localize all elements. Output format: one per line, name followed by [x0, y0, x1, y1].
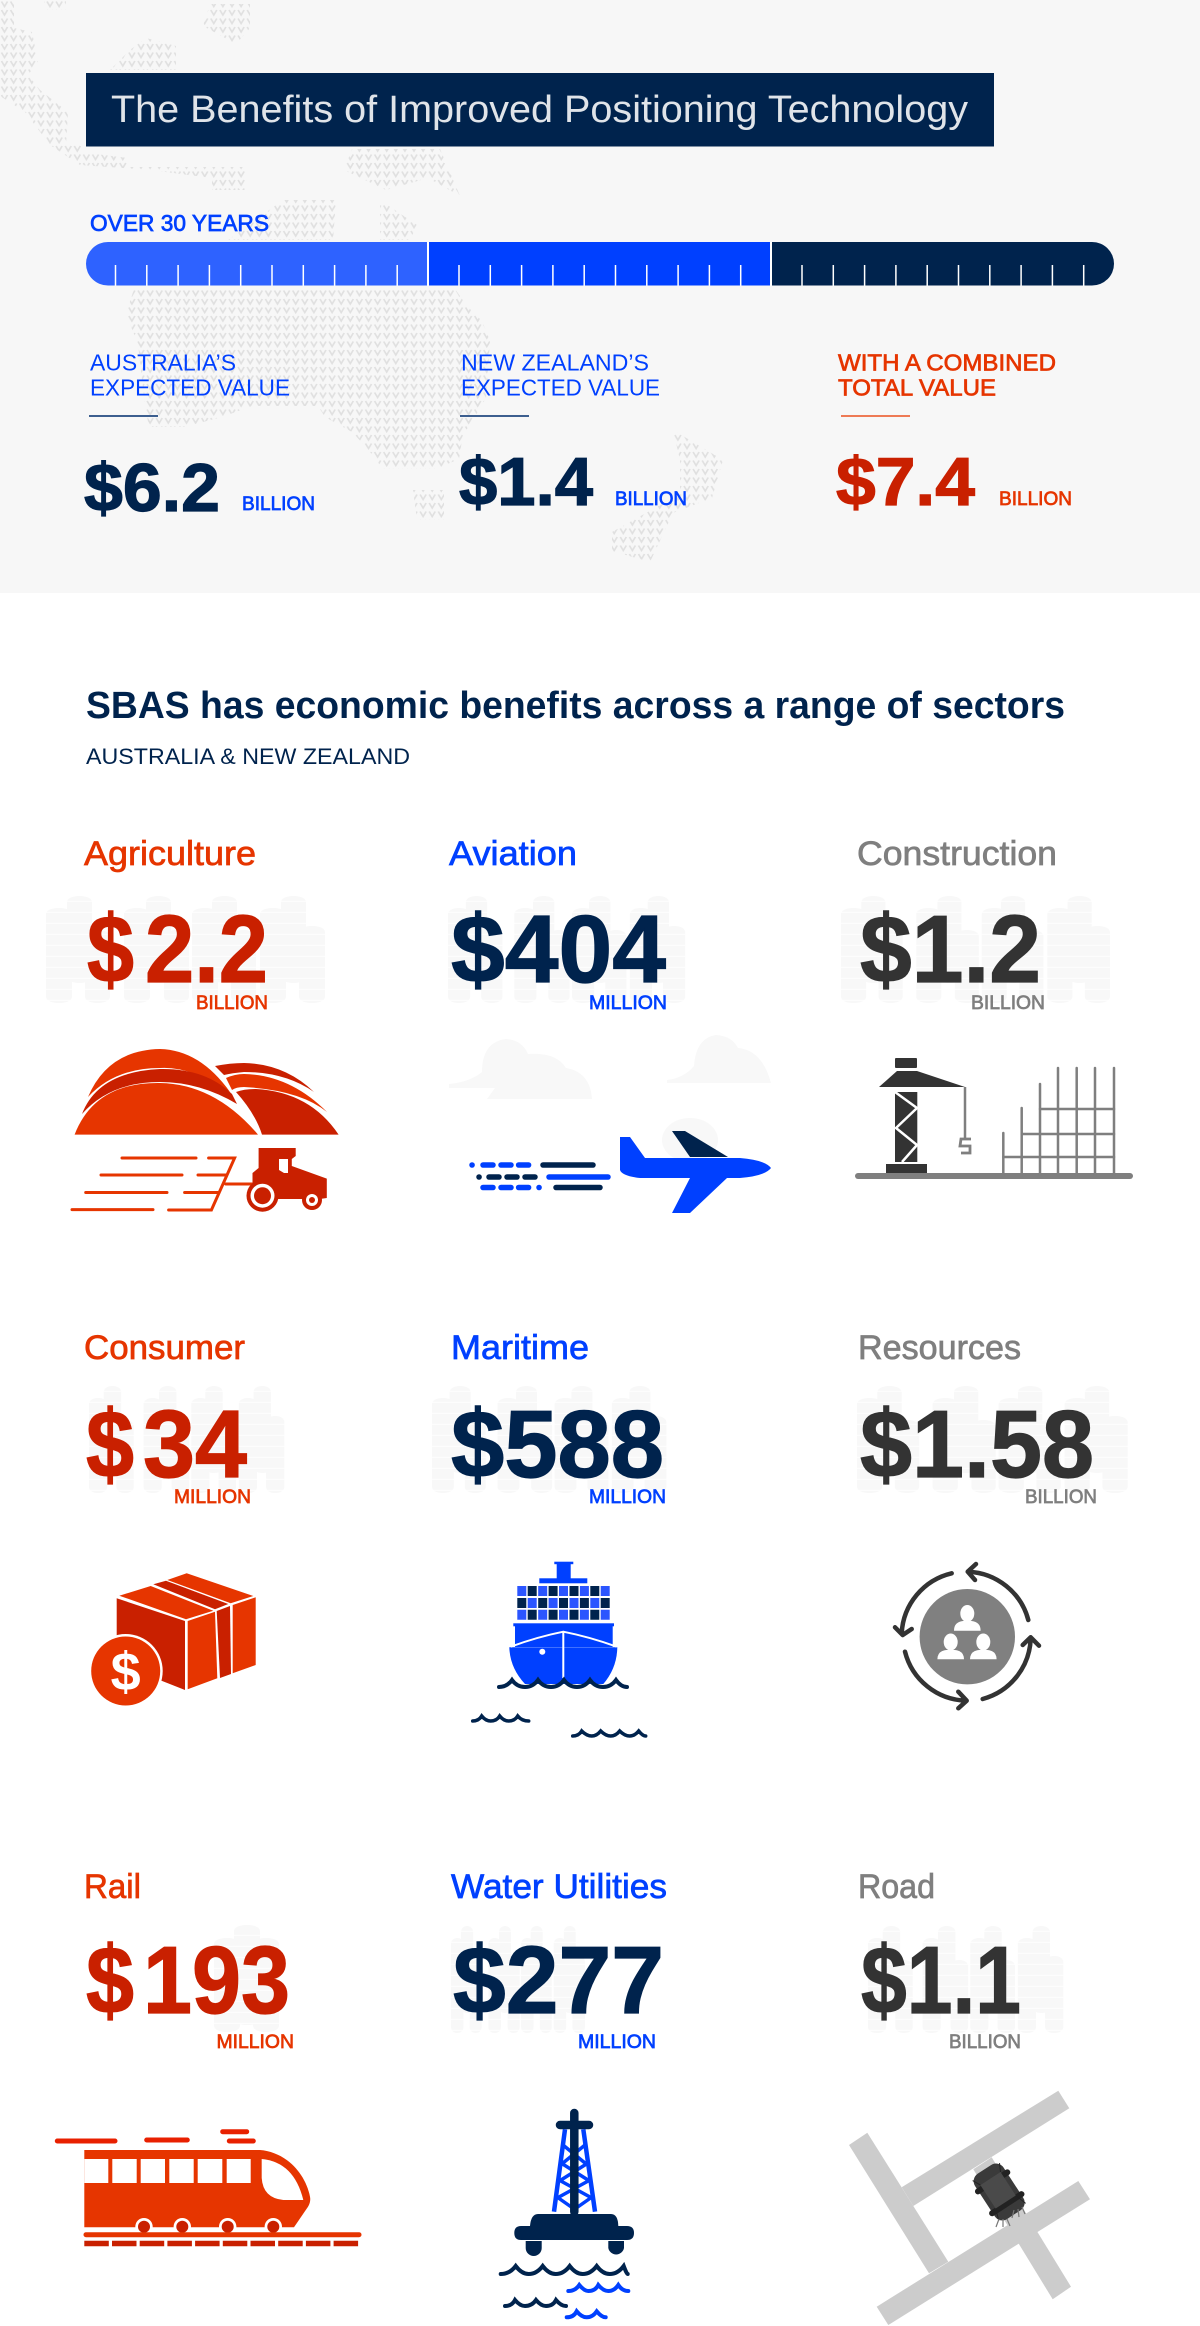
- label: Consumer: [84, 1329, 245, 1367]
- coin stacks backdrop: [868, 1926, 1063, 2033]
- panel: construction: [841, 835, 1130, 1176]
- section heading: SBAS has economic benefits across a range of sectors: [86, 685, 1065, 727]
- value: $: [86, 1391, 134, 1498]
- unit: BILLION: [1025, 1487, 1097, 1508]
- stat: combined total: $7.4: [836, 444, 975, 520]
- value: 2.2: [145, 896, 268, 1003]
- stat: New Zealand: [459, 350, 687, 520]
- coin stacks backdrop: [46, 896, 325, 1003]
- title banner: [86, 73, 994, 146]
- unit: MILLION: [216, 2032, 294, 2053]
- label: Agriculture: [84, 835, 256, 873]
- coin stacks backdrop: [841, 896, 1110, 1003]
- icon: crane and scaffold: [858, 1058, 1130, 1176]
- value: $1.1: [861, 1927, 1021, 2034]
- coin stacks backdrop: [857, 1386, 1128, 1493]
- unit: BILLION: [196, 993, 268, 1014]
- value: $: [87, 896, 134, 1003]
- label: Road: [858, 1868, 935, 1906]
- timeline caption: OVER 30 YEARS: [90, 210, 269, 236]
- title banner: The Benefits of Improved Positioning Technology: [111, 89, 968, 131]
- stat: Australia: AUSTRALIA’S: [90, 350, 236, 376]
- value: [86, 1927, 290, 2034]
- panel: agriculture: [46, 835, 339, 1212]
- value: [86, 1391, 247, 1498]
- stat: New Zealand: NEW ZEALAND’S: [461, 350, 649, 376]
- icon: parcel with dollar coin: [89, 1573, 256, 1708]
- icon: container ship: [473, 1562, 646, 1736]
- panel: benefits overview: [0, 0, 1200, 593]
- stat: New Zealand: $1.4: [459, 444, 593, 520]
- coin stacks backdrop: [89, 1386, 284, 1493]
- label: Resources: [858, 1329, 1021, 1367]
- stat: Australia: [84, 350, 315, 526]
- value: 34: [143, 1391, 247, 1498]
- section subheading: AUSTRALIA & NEW ZEALAND: [86, 744, 410, 769]
- panel: aviation: [448, 835, 771, 1213]
- panel: maritime: [432, 1329, 666, 1736]
- label: Rail: [84, 1868, 141, 1906]
- panel: consumer: [84, 1329, 284, 1708]
- stat: New Zealand: EXPECTED VALUE: [461, 375, 660, 401]
- panel: resources: [857, 1329, 1128, 1708]
- label: Construction: [857, 835, 1057, 873]
- value: 193: [143, 1927, 290, 2034]
- panel: water utilities: [451, 1868, 667, 2317]
- label: Water Utilities: [451, 1868, 667, 1906]
- icon: train: [57, 2132, 359, 2246]
- icon: car on road intersection: [849, 2091, 1090, 2325]
- unit: BILLION: [949, 2032, 1021, 2053]
- stat: Australia: $6.2: [84, 450, 220, 526]
- unit: MILLION: [578, 2032, 656, 2053]
- coin stacks backdrop: [448, 896, 685, 1003]
- unit: MILLION: [589, 993, 667, 1014]
- value: $277: [453, 1927, 664, 2034]
- value: [87, 896, 268, 1003]
- stat: combined total: TOTAL VALUE: [838, 375, 996, 401]
- value: $588: [451, 1391, 664, 1498]
- panel: rail: [57, 1868, 359, 2246]
- stat: combined total: [836, 350, 1072, 520]
- unit: MILLION: [174, 1487, 251, 1508]
- stat: combined total: BILLION: [999, 489, 1072, 510]
- stat: New Zealand: BILLION: [615, 489, 687, 510]
- label: Maritime: [451, 1329, 589, 1367]
- icon: parcel with dollar coin: $: [111, 1642, 141, 1702]
- 30-year progress bar: [86, 242, 1114, 286]
- panel: road: [849, 1868, 1090, 2325]
- value: $: [86, 1927, 134, 2034]
- icon: people in cycle of arrows: [895, 1564, 1039, 1708]
- value: $1.58: [860, 1391, 1094, 1498]
- icon: offshore rig: [501, 2113, 634, 2317]
- unit: BILLION: [971, 993, 1045, 1014]
- stat: combined total: WITH A COMBINED: [838, 350, 1056, 376]
- value: $1.2: [860, 896, 1041, 1003]
- icon: plane with clouds: [449, 1035, 771, 1213]
- value: $404: [451, 896, 666, 1003]
- stat: Australia: BILLION: [242, 494, 315, 515]
- coin stacks backdrop: [214, 1925, 279, 2032]
- coin stacks backdrop: [432, 1386, 666, 1493]
- unit: MILLION: [589, 1487, 666, 1508]
- label: Aviation: [449, 835, 577, 873]
- dotted world map backdrop: [0, 0, 723, 562]
- stat: Australia: EXPECTED VALUE: [90, 375, 290, 401]
- icon: hills and tractor: [72, 1049, 339, 1212]
- coin stacks backdrop: [451, 1926, 585, 2033]
